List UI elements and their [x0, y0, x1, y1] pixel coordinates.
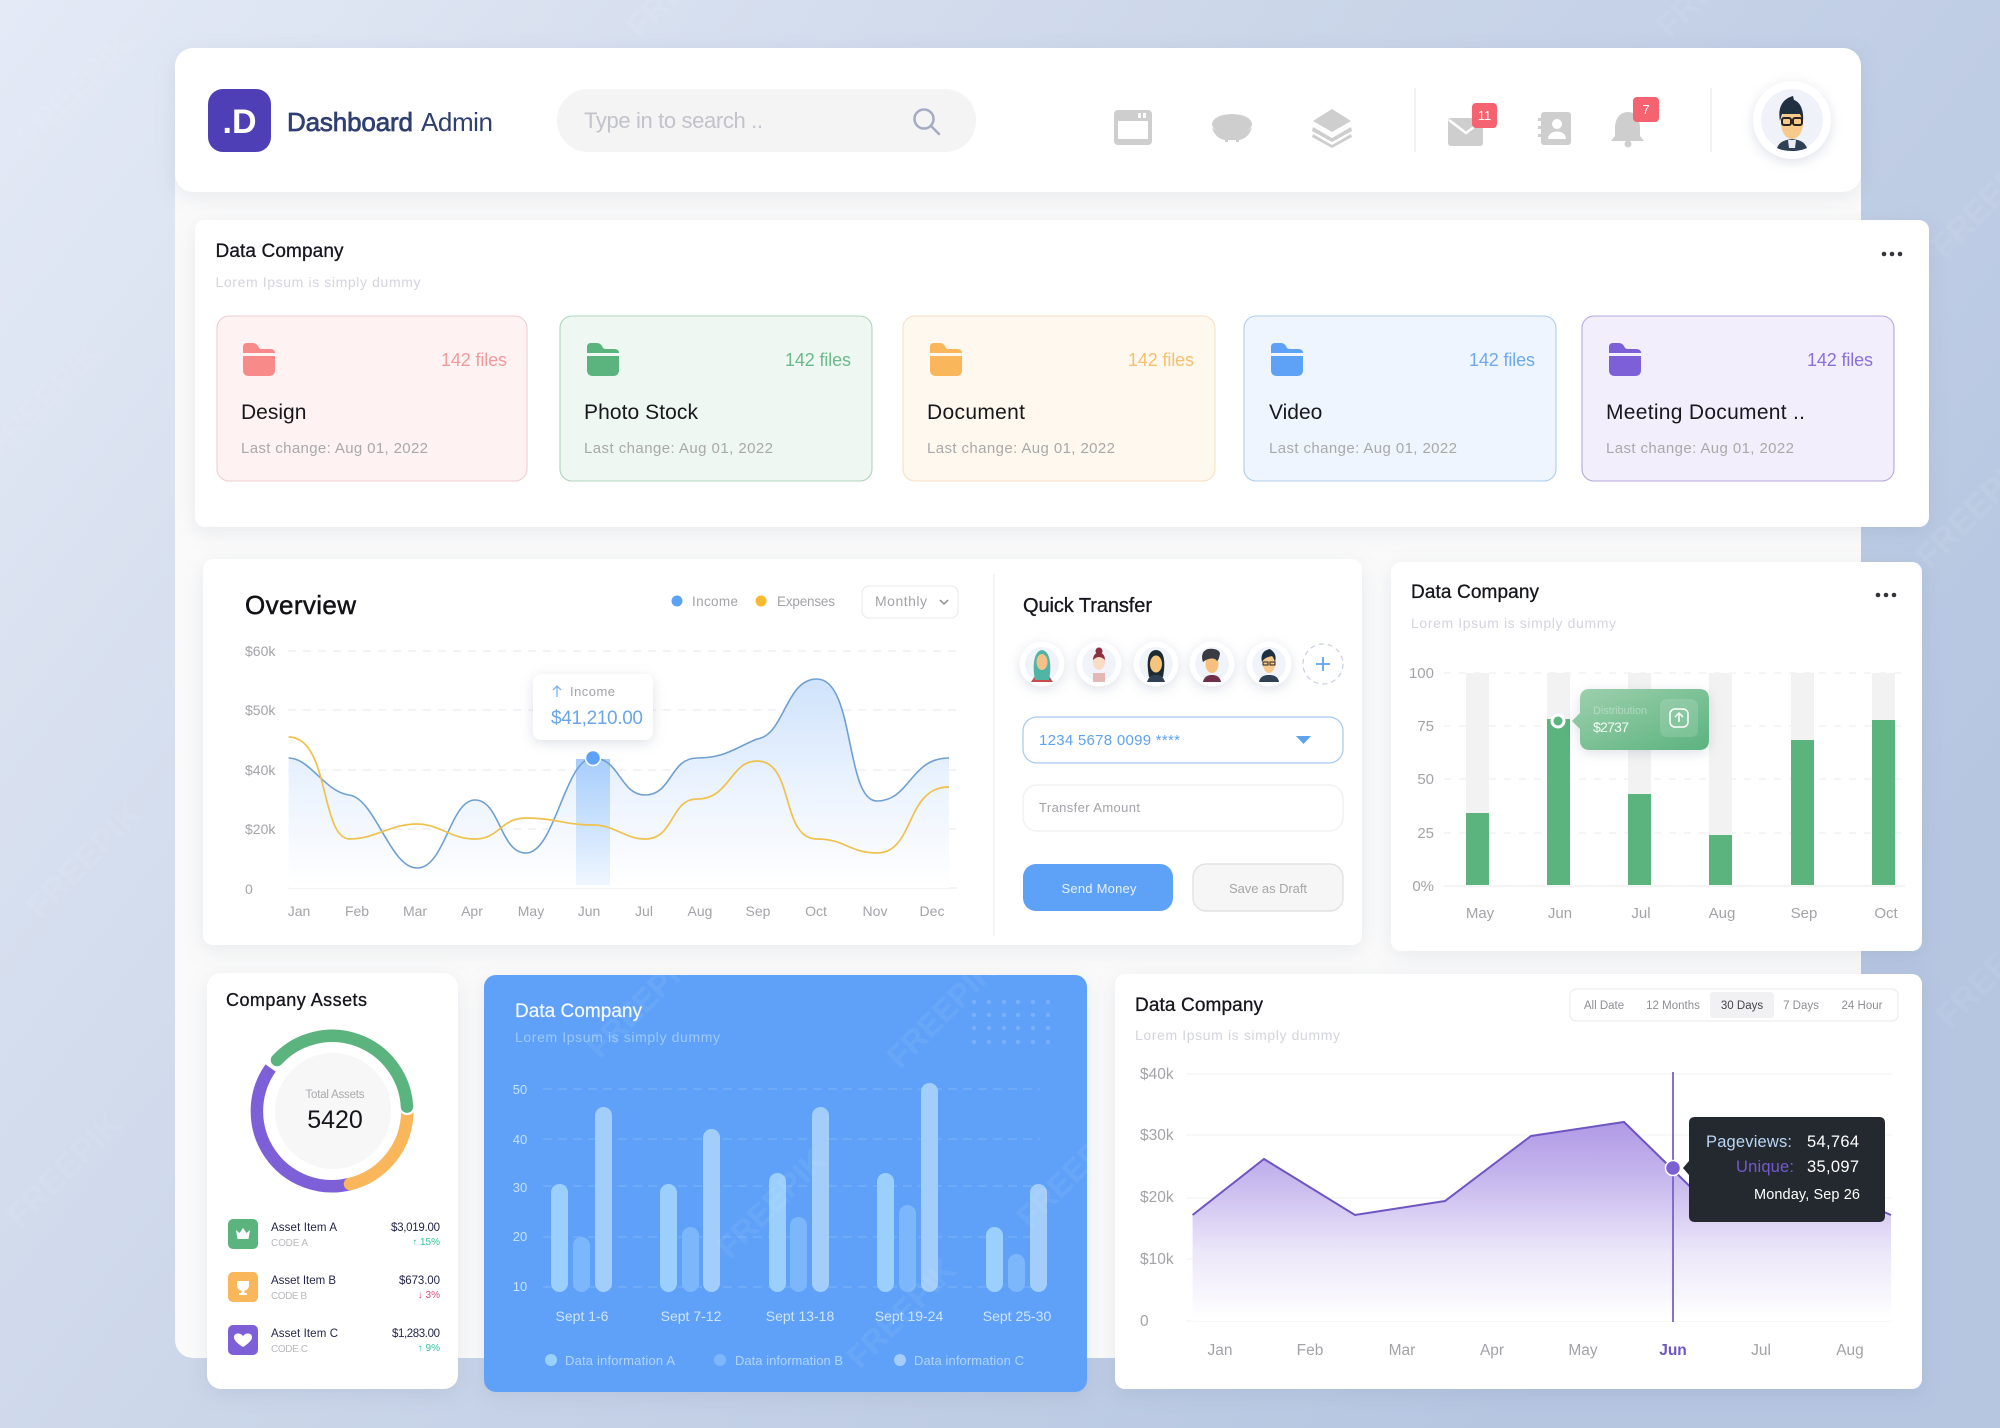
icon: window — [1114, 110, 1152, 145]
dropdown: monthly — [862, 586, 958, 618]
subheading: Lorem Ipsum is simply dummy — [515, 1029, 720, 1045]
bar chart: 100 — [1409, 665, 1434, 682]
area chart — [1140, 1066, 1892, 1359]
grouped bar chart: Sept 7-12 — [661, 1308, 722, 1324]
tabs: date range: 24 Hour — [1842, 1000, 1883, 1012]
legend: Income — [692, 594, 738, 609]
brand name: Dashboard — [287, 107, 413, 137]
line chart: income vs expenses: Jan — [288, 903, 310, 919]
search box: Type in to search .. — [584, 108, 763, 133]
tooltip: income: Income — [570, 684, 615, 699]
tooltip: income: $41,210.00 — [551, 708, 643, 729]
avatar: bun hair — [1076, 642, 1122, 686]
line chart: income vs expenses: Feb — [345, 903, 369, 919]
bar chart: Jun — [1548, 905, 1572, 922]
input: card number: 1234 5678 0099 **** — [1039, 732, 1180, 749]
icon: add contact — [1303, 644, 1343, 684]
button: save as draft: Save as Draft — [1229, 881, 1307, 896]
area chart: Aug — [1836, 1342, 1864, 1359]
area chart: $40k — [1140, 1066, 1174, 1083]
grouped bar chart: 10 — [513, 1279, 527, 1294]
tooltip: pageviews: Pageviews: — [1706, 1133, 1792, 1151]
legend: Data information B — [735, 1353, 843, 1368]
icon: bell with badge — [1611, 97, 1659, 148]
watermark: FREEPIK — [9, 24, 140, 156]
icon: bell with badge: 7 — [1642, 102, 1650, 117]
line chart: income vs expenses: Jul — [635, 903, 653, 919]
card: video: Video — [1269, 401, 1322, 424]
card: document: Last change: Aug 01, 2022 — [927, 440, 1115, 457]
icon: mail with badge: 11 — [1478, 108, 1491, 123]
line chart: income vs expenses: May — [518, 903, 544, 919]
card: meeting document: Meeting Document .. — [1606, 401, 1805, 424]
legend: Data information A — [565, 1353, 675, 1368]
bar chart: Aug — [1709, 905, 1735, 922]
card: document: Document — [927, 401, 1025, 424]
tooltip: pageviews — [1666, 1117, 1885, 1222]
divider — [993, 574, 995, 936]
bar chart: Sep — [1791, 905, 1817, 922]
panel: purple area chart — [1115, 974, 1922, 1389]
list item: asset c: CODE C — [271, 1344, 308, 1355]
list item: asset c: ↑ 9% — [418, 1343, 440, 1354]
tooltip: distribution — [1552, 689, 1709, 750]
grouped bar chart: 40 — [513, 1132, 527, 1147]
icon: layers — [1312, 109, 1352, 148]
area chart: Jun — [1659, 1342, 1687, 1359]
panel: data company files — [195, 220, 1929, 527]
line chart: income vs expenses: Apr — [461, 903, 483, 919]
card: document — [903, 316, 1215, 481]
bar chart: 25 — [1417, 825, 1434, 842]
list item: asset a: $3,019.00 — [391, 1222, 440, 1234]
tabs: date range: 7 Days — [1783, 1000, 1819, 1012]
watermark: FREEPIK — [1009, 1111, 1133, 1235]
button: send money — [1023, 864, 1173, 911]
area chart: Jul — [1751, 1342, 1771, 1359]
line chart: income vs expenses: Dec — [920, 903, 944, 919]
line chart: income vs expenses: $50k — [245, 702, 276, 718]
card: document: 142 files — [1128, 350, 1194, 370]
subheading: Lorem Ipsum is simply dummy — [1135, 1027, 1340, 1043]
panel: overview and quick transfer — [203, 559, 1362, 945]
line chart: income vs expenses: 0 — [245, 881, 253, 897]
list item: asset b — [228, 1272, 440, 1302]
watermark: FREEPIK — [19, 794, 150, 926]
grouped bar chart: Sept 19-24 — [875, 1308, 943, 1324]
watermark: FREEPIK — [0, 1104, 130, 1236]
button: save as draft — [1193, 864, 1343, 911]
logo — [208, 89, 271, 152]
card: video: Last change: Aug 01, 2022 — [1269, 440, 1457, 457]
list item: asset b: Asset Item B — [271, 1275, 336, 1287]
donut chart: 5420 — [307, 1106, 363, 1134]
area chart: Mar — [1389, 1342, 1415, 1359]
grouped bar chart: Sept 25-30 — [983, 1308, 1051, 1324]
dot pattern — [972, 1000, 1050, 1044]
line chart: income vs expenses: Aug — [688, 903, 712, 919]
heading: Data Company — [1135, 995, 1264, 1016]
section: quick transfer — [1020, 595, 1343, 911]
area chart: 0 — [1140, 1313, 1149, 1330]
donut chart — [257, 1036, 407, 1186]
input: card number — [1023, 717, 1343, 763]
input: transfer amount: Transfer Amount — [1039, 800, 1140, 815]
icon: coins — [1212, 114, 1252, 142]
tooltip: distribution: $2737 — [1593, 719, 1629, 735]
card: design: Design — [241, 401, 306, 424]
heading: Data Company — [216, 241, 344, 262]
area chart: Jan — [1208, 1342, 1232, 1359]
list item: asset a: CODE A — [271, 1238, 308, 1249]
heading: Company Assets — [226, 990, 367, 1010]
bar chart: May — [1466, 905, 1495, 922]
line chart: income vs expenses: $60k — [245, 643, 276, 659]
list item: asset a: ↑ 15% — [412, 1237, 440, 1248]
area chart: May — [1568, 1342, 1598, 1359]
list item: asset a: Asset Item A — [271, 1222, 337, 1234]
list item: asset b: $673.00 — [399, 1275, 440, 1287]
panel: distribution bar chart — [1391, 562, 1922, 951]
menu dots — [1882, 252, 1902, 256]
avatar: user — [1753, 81, 1831, 159]
header bar — [175, 48, 1861, 192]
line chart: income vs expenses: Oct — [805, 903, 827, 919]
avatar: dark quiff — [1190, 642, 1234, 686]
dropdown: monthly: Monthly — [875, 593, 927, 609]
legend: Expenses — [777, 594, 835, 609]
heading: overview: Overview — [245, 590, 356, 620]
avatar: glasses — [1246, 642, 1292, 686]
line chart: income vs expenses: Jun — [578, 903, 600, 919]
subheading: Lorem Ipsum is simply dummy — [216, 274, 420, 290]
donut chart: Total Assets — [306, 1089, 365, 1101]
grouped bar chart: Sept 1-6 — [556, 1308, 609, 1324]
card: photo stock: 142 files — [785, 350, 851, 370]
card: design — [217, 316, 527, 481]
grouped bar chart: Sept 13-18 — [766, 1308, 834, 1324]
card: photo stock — [560, 316, 872, 481]
line chart: income vs expenses: Nov — [863, 903, 887, 919]
grouped bar chart: 20 — [513, 1229, 527, 1244]
card: meeting document: 142 files — [1807, 350, 1873, 370]
area chart: $30k — [1140, 1127, 1174, 1144]
card: photo stock: Last change: Aug 01, 2022 — [584, 440, 773, 457]
card: design: Last change: Aug 01, 2022 — [241, 440, 428, 457]
card: meeting document: Last change: Aug 01, 2022 — [1606, 440, 1794, 457]
bar chart: Jul — [1631, 905, 1651, 922]
bar chart: Oct — [1874, 905, 1898, 922]
card: video — [1244, 316, 1556, 481]
list item: asset c: $1,283.00 — [392, 1328, 440, 1340]
line chart: income vs expenses — [245, 643, 957, 919]
heading: Quick Transfer — [1023, 595, 1152, 617]
divider — [1710, 88, 1712, 152]
legend: Data information C — [914, 1353, 1024, 1368]
card: video: 142 files — [1469, 350, 1535, 370]
avatar: teal hijab — [1020, 642, 1064, 686]
area chart: Apr — [1480, 1342, 1504, 1359]
grouped bar chart: 30 — [513, 1180, 527, 1195]
heading: Data Company — [1411, 582, 1540, 603]
subheading: Lorem Ipsum is simply dummy — [1411, 615, 1616, 631]
brand name: Admin — [421, 107, 493, 137]
watermark: FREEPIK — [579, 941, 703, 1065]
divider — [1414, 88, 1416, 152]
input: transfer amount — [1023, 785, 1343, 831]
list item: asset c — [228, 1325, 440, 1355]
area chart: Feb — [1297, 1342, 1323, 1359]
card: photo stock: Photo Stock — [584, 401, 698, 424]
tabs: date range: All Date — [1584, 1000, 1624, 1012]
bar chart: 0% — [1412, 878, 1434, 895]
back panel — [175, 48, 1861, 1358]
tooltip: distribution: Distribution — [1593, 705, 1647, 717]
watermark: FREEPIK — [839, 1251, 963, 1375]
legend — [545, 1353, 1024, 1368]
tabs: date range: 30 Days — [1721, 1000, 1763, 1012]
tooltip: pageviews: 35,097 — [1807, 1158, 1859, 1176]
area chart: $20k — [1140, 1189, 1174, 1206]
grouped bar chart — [513, 1082, 1051, 1324]
card: design: 142 files — [441, 350, 507, 370]
heading: Data Company — [515, 1001, 642, 1022]
button: send money: Send Money — [1062, 881, 1137, 896]
icon: contacts — [1538, 112, 1571, 145]
watermark: FREEPIK — [879, 951, 1003, 1075]
bar chart: 75 — [1417, 718, 1434, 735]
menu dots — [1876, 593, 1896, 597]
tooltip: income — [533, 674, 653, 740]
card: meeting document — [1582, 316, 1894, 481]
tabs: date range: 12 Months — [1646, 1000, 1700, 1012]
line chart: income vs expenses: $20k — [245, 821, 276, 837]
tooltip: pageviews: Unique: — [1736, 1158, 1794, 1176]
grouped bar chart: 50 — [513, 1082, 527, 1097]
tooltip: pageviews: Monday, Sep 26 — [1754, 1187, 1860, 1203]
list item: asset b: CODE B — [271, 1291, 307, 1302]
icon: mail with badge — [1448, 103, 1497, 146]
line chart: income vs expenses: Mar — [403, 903, 427, 919]
bar chart: 50 — [1417, 771, 1434, 788]
line chart: income vs expenses: Sep — [746, 903, 771, 919]
area chart: $10k — [1140, 1251, 1174, 1268]
tabs: date range — [1570, 989, 1898, 1021]
list item: asset c: Asset Item C — [271, 1328, 338, 1340]
list item: asset b: ↓ 3% — [418, 1290, 440, 1301]
watermark: FREEPIK — [709, 1141, 833, 1265]
avatar: long hair — [1134, 642, 1178, 686]
watermark — [579, 941, 1133, 1375]
list item: asset a — [228, 1219, 440, 1249]
search box — [557, 89, 976, 152]
legend — [672, 594, 835, 609]
panel: company assets — [207, 973, 458, 1389]
logo: .D — [222, 103, 256, 141]
bar chart — [1409, 665, 1905, 922]
line chart: income vs expenses: $40k — [245, 762, 276, 778]
tooltip: pageviews: 54,764 — [1807, 1133, 1859, 1151]
panel: blue data company — [484, 941, 1133, 1392]
